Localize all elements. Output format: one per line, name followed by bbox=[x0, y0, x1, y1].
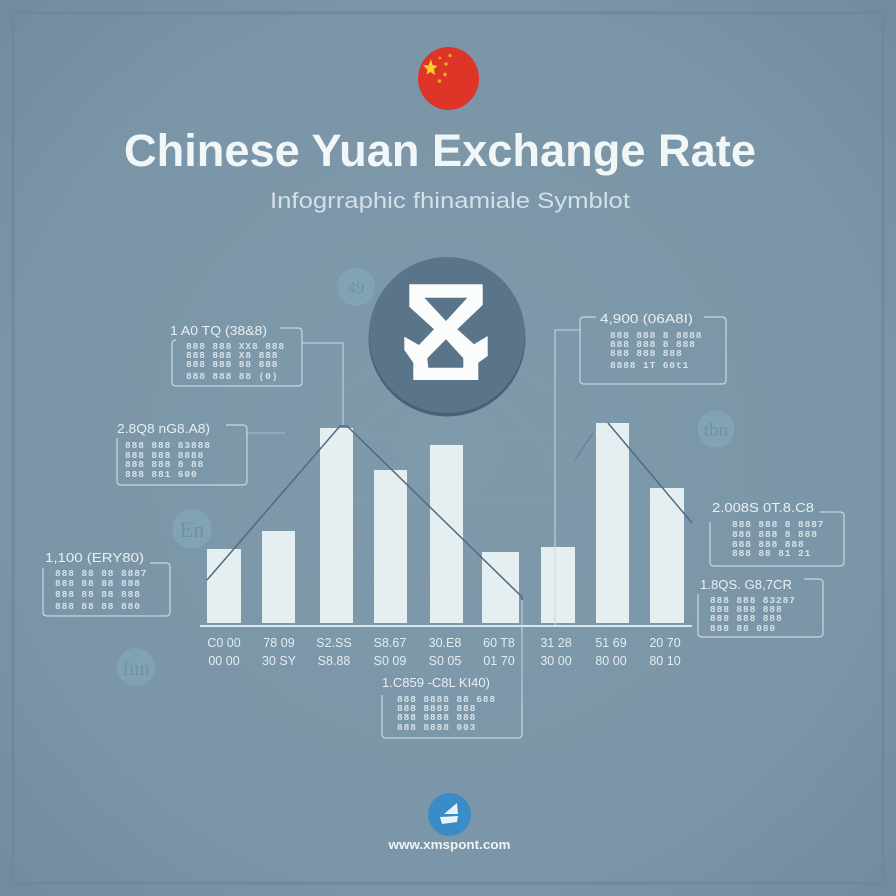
callout: right lower: 888 88 080 bbox=[710, 623, 776, 634]
callout: right upper: 888 888 8 888 bbox=[732, 529, 818, 540]
subtitle: Infogrraphic fhinamiale Symblot bbox=[270, 188, 631, 213]
axis labels: 00 00 bbox=[208, 654, 240, 668]
callout: bottom: 1.C859 -C8L KI40) bbox=[382, 675, 490, 690]
callout: right lower: 888 888 888 bbox=[710, 613, 783, 624]
axis labels: 30.E8 bbox=[429, 636, 461, 650]
axis labels: 01 70 bbox=[483, 654, 515, 668]
callout: bottom: 888 8888 888 bbox=[397, 712, 476, 723]
callout: far left: 888 88 88 888 bbox=[55, 578, 141, 589]
axis labels: 78 09 bbox=[263, 636, 295, 650]
callout: far left: 1,100 (ERY80) bbox=[45, 550, 144, 565]
icon: China flag bbox=[418, 47, 479, 110]
callout: far left: 888 88 88 8887 bbox=[55, 568, 147, 579]
callout: middle left: 888 881 600 bbox=[125, 469, 198, 480]
axis labels: 60 T8 bbox=[483, 636, 515, 650]
icon: coin 49 bbox=[337, 268, 375, 306]
axis labels: S0 09 bbox=[374, 654, 406, 668]
callout: right lower: 1.8QS. G8,7CR bbox=[700, 577, 792, 592]
callout: top right: 8888 1T 60t1 bbox=[610, 360, 689, 371]
callout: bottom bbox=[382, 675, 522, 738]
callout: bottom: 888 8888 88 688 bbox=[397, 694, 496, 705]
icon: coin fun: fun bbox=[123, 658, 149, 680]
callout: right lower: 888 888 888 bbox=[710, 604, 783, 615]
callout: bottom: 888 8888 003 bbox=[397, 722, 476, 733]
axis labels: S2.SS bbox=[316, 636, 352, 650]
axis labels: 20 70 bbox=[649, 636, 681, 650]
callout: far left: 888 88 88 880 bbox=[55, 601, 141, 612]
callout: top left: 888 888 X8 888 bbox=[186, 350, 278, 361]
title: Chinese Yuan Exchange Rate bbox=[124, 125, 756, 176]
callout: middle left: 888 888 8888 bbox=[125, 450, 204, 461]
icon: coin tbn bbox=[698, 410, 734, 448]
callout: middle left bbox=[117, 421, 247, 485]
website url: www.xmspont.com bbox=[387, 837, 510, 852]
icon: coin tbn: tbn bbox=[704, 420, 729, 441]
callout: right lower bbox=[698, 577, 823, 637]
axis labels: 80 10 bbox=[649, 654, 681, 668]
callout: right upper bbox=[710, 500, 844, 566]
callout: far left: 888 88 88 888 bbox=[55, 589, 141, 600]
icon: coin En bbox=[172, 509, 212, 549]
axis labels: 30 00 bbox=[540, 654, 572, 668]
icon: logo bbox=[428, 793, 471, 836]
axis labels: C0 00 bbox=[207, 636, 241, 650]
axis labels: 31 28 bbox=[540, 636, 572, 650]
callout: top right: 888 888 888 bbox=[610, 348, 683, 359]
callout: middle left: 2.8Q8 nG8.A8) bbox=[117, 421, 210, 436]
callout: top right: 888 888 8 8888 bbox=[610, 330, 702, 341]
axis labels: S8.88 bbox=[318, 654, 350, 668]
callout: top right: 888 888 8 888 bbox=[610, 339, 696, 350]
callout: top left bbox=[170, 323, 302, 386]
callout: top left: 888 888 88 888 bbox=[186, 359, 278, 370]
callout: top left: 1 A0 TQ (38&8) bbox=[170, 323, 267, 338]
callout: bottom: 888 8888 888 bbox=[397, 703, 476, 714]
callout: right upper: 2.008S 0T.8.C8 bbox=[712, 500, 814, 515]
callout: top right: 4,900 (06A8I) bbox=[600, 311, 693, 326]
callout: right upper: 888 888 8 8887 bbox=[732, 519, 824, 530]
axis labels: 51 69 bbox=[595, 636, 627, 650]
callout: right upper: 888 88 81 21 bbox=[732, 548, 811, 559]
axis labels: S0 05 bbox=[429, 654, 461, 668]
icon: central yuan symbol bbox=[368, 257, 526, 416]
callout: middle left: 888 888 8 88 bbox=[125, 459, 204, 470]
callout: middle left: 888 888 83888 bbox=[125, 440, 211, 451]
callout: right lower: 888 888 83287 bbox=[710, 595, 796, 606]
icon: coin fun bbox=[117, 648, 155, 686]
callout: top right bbox=[580, 311, 726, 384]
callout: top left: 888 888 XX8 888 bbox=[186, 341, 285, 352]
callout: right upper: 888 888 888 bbox=[732, 539, 805, 550]
axis labels: 80 00 bbox=[595, 654, 627, 668]
axis labels: S8.67 bbox=[374, 636, 406, 650]
axis labels bbox=[207, 636, 681, 668]
callout: far left bbox=[43, 550, 170, 616]
bar chart bbox=[200, 330, 692, 735]
axis labels: 30 SY bbox=[262, 654, 297, 668]
callout: top left: 888 888 88 (0) bbox=[186, 371, 278, 382]
icon: coin En: En bbox=[180, 517, 204, 542]
icon: coin 49: 49 bbox=[348, 278, 364, 297]
